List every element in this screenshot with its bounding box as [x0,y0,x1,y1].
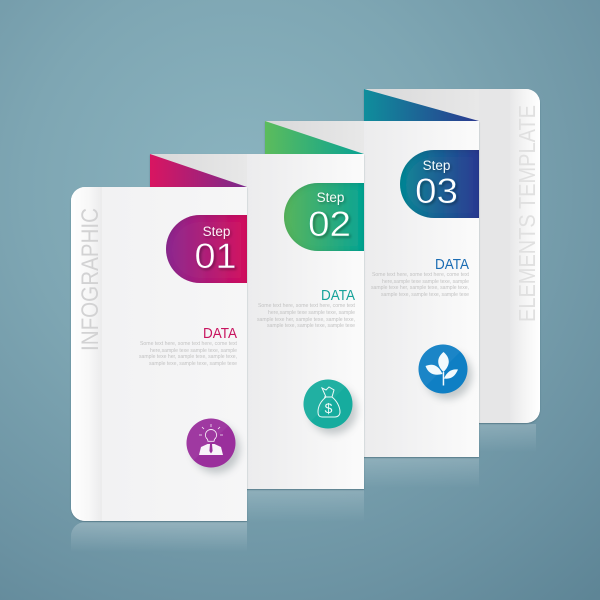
step 02 text block: sample texe her, sample texe, sample texe, [257,317,355,323]
step 02 text block: here,sample texe sample texe, sample [268,310,355,316]
step 02 label: Step [317,190,344,205]
fold triangle: step 02 [265,121,364,154]
reflections [71,424,536,552]
panel: step 02 [150,121,364,489]
step 01 number: 01 [194,237,236,276]
fold triangle: step 03 [364,89,479,121]
step 02 text block: DATA [321,287,355,304]
step 03 text block: Some text here, some text here, come text [372,272,470,278]
step 02 icon: money bag [304,380,357,434]
step 02 tab [284,183,364,251]
step 02 number: 02 [308,205,351,244]
step 01 text block [139,325,238,367]
step 01 text block: sample texe her, sample texe, sample texe, [139,354,237,360]
step 03 text block: DATA [435,256,469,273]
panel: back page with elements template [364,89,540,423]
fold triangle: step 01 [150,154,247,187]
step 03 text block: sample texe her, sample texe, sample texe, [371,285,469,291]
panel: step 03 [265,89,479,457]
step 01 text block: Some text here, some text here, come text [140,341,238,347]
spine text: infographic: INFOGRAPHIC [77,208,104,351]
step 01 label: Step [203,224,230,239]
step 01 text block: here,sample texe sample texe, sample [150,348,237,354]
step 03 label: Step [423,158,450,173]
step 03 number: 03 [415,172,458,211]
spine text: elements template: ELEMENTS TEMPLATE [514,105,540,322]
step 03 icon: leaf [418,344,472,399]
step 03 tab [400,150,479,218]
step 01 text block: sample texe, sample texe, sample texe [149,361,237,367]
step 02 text block: sample texe, sample texe, sample texe [267,323,355,329]
step 02 icon: money bag: $ [325,400,333,416]
panel: step 01 [71,154,247,521]
step 01 icon: businessman with light bulb [186,418,240,473]
step 03 text block: here,sample texe sample texe, sample [382,279,469,285]
step 03 text block: sample texe, sample texe, sample texe [381,292,469,298]
step 01 tab [166,215,247,283]
step 02 text block [257,287,356,329]
step 01 text block: DATA [203,325,237,342]
step 02 text block: Some text here, some text here, come text [258,303,356,309]
step 03 text block [371,256,470,298]
